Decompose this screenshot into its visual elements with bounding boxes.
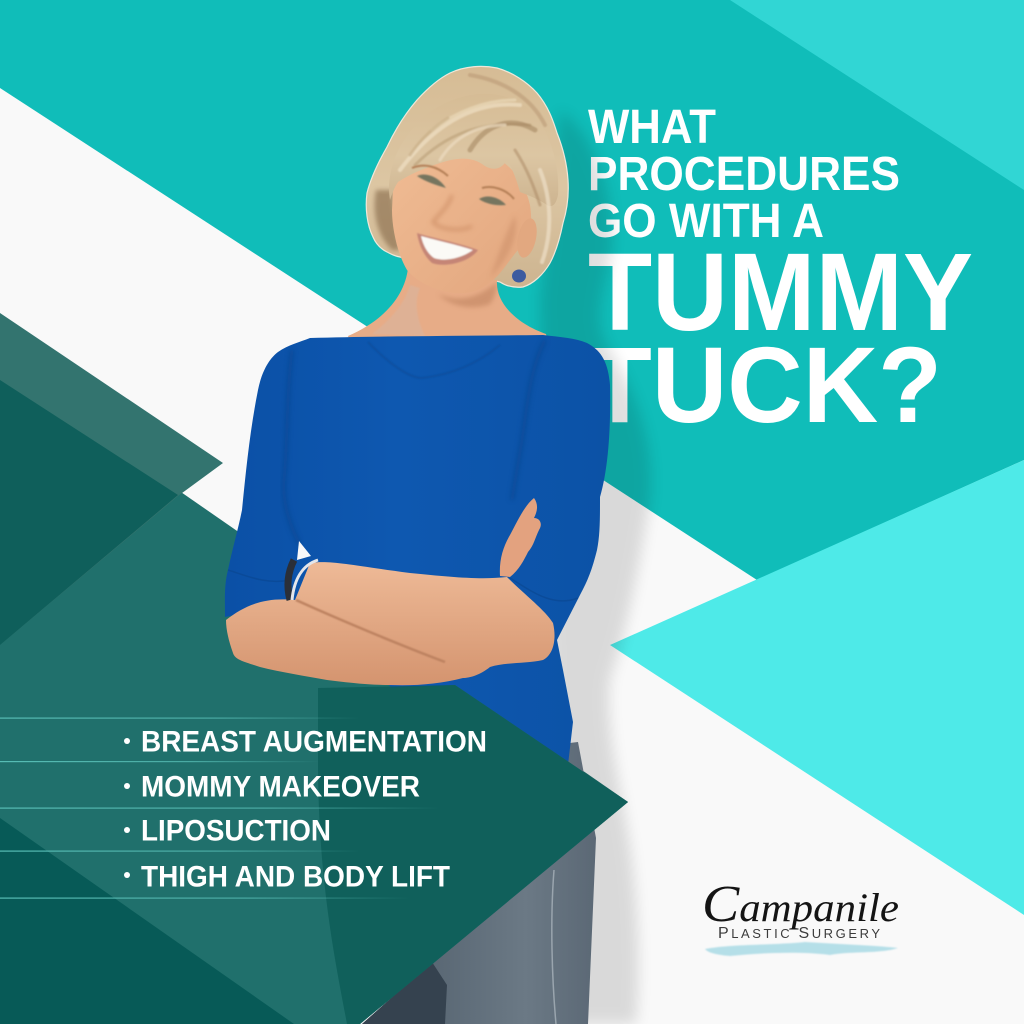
fringe hair: [389, 94, 558, 206]
shirt folds: [228, 340, 578, 601]
item: thigh and body lift: THIGH AND BODY LIFT: [141, 860, 450, 894]
smile: [417, 233, 478, 265]
list divider lines: [0, 718, 440, 899]
logo: Campanile Plastic Surgery: Campanile: [702, 876, 899, 933]
face: [392, 148, 531, 293]
panel: dark overlay over figure: [0, 685, 628, 1024]
title: TUCK?: [588, 324, 942, 445]
hair strands: [400, 75, 549, 262]
gap between arm and body: [297, 541, 311, 560]
item: liposuction: LIPOSUCTION: [141, 814, 331, 848]
panel: dark triangle shapes: [0, 313, 628, 1024]
procedures list: [124, 726, 487, 894]
cheek shading: [490, 215, 516, 278]
item: mommy makeover: MOMMY MAKEOVER: [141, 770, 420, 804]
title: PROCEDURES: [588, 148, 900, 201]
title: WHAT: [588, 101, 716, 154]
crossed arms: [226, 562, 555, 685]
arm crease: [296, 600, 445, 662]
woman figure: [225, 66, 610, 1024]
title: GO WITH A: [588, 195, 824, 248]
hair underside shadow: [375, 190, 400, 250]
logo brush stroke: [705, 942, 898, 956]
bracelet: [288, 560, 318, 600]
item: breast augmentation: BREAST AUGMENTATION: [141, 726, 487, 758]
jeans: [362, 742, 596, 1024]
title: TUMMY: [588, 231, 973, 354]
woman's cast shadow: [540, 110, 651, 1024]
eyes: [412, 166, 514, 205]
logo: Campanile Plastic Surgery: PLASTIC SURGERY: [718, 925, 880, 942]
back hair: [366, 66, 568, 287]
title: [588, 101, 973, 445]
earring: [512, 270, 526, 282]
logo: Campanile Plastic Surgery: [702, 876, 899, 956]
ear: [514, 217, 540, 259]
nose: [433, 195, 472, 229]
top: [225, 335, 610, 765]
hand: [500, 498, 541, 577]
neck and chest: [348, 268, 548, 342]
